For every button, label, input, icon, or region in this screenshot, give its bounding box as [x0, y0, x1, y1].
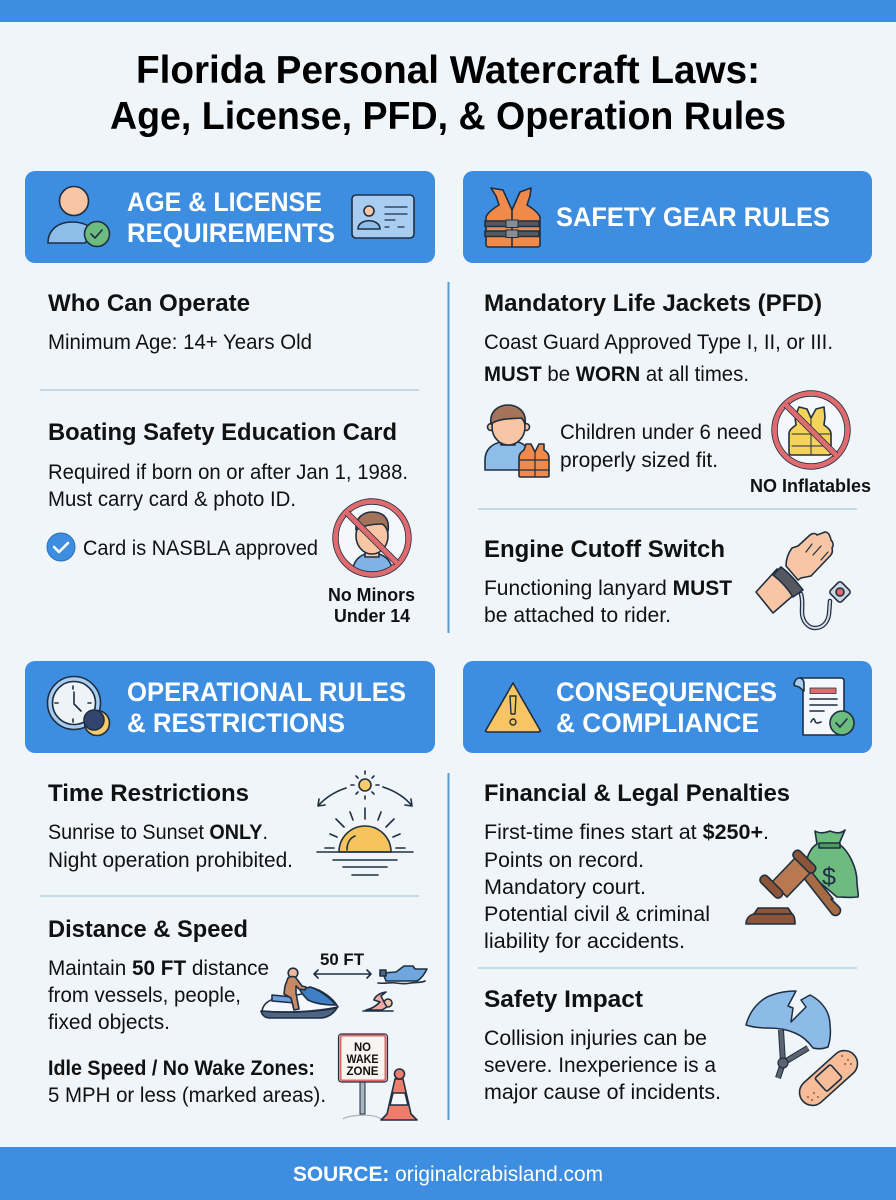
header: consequences: & COMPLIANCE — [556, 708, 759, 738]
icon: boat — [378, 966, 427, 984]
icon: jet ski — [261, 968, 338, 1018]
text: children under 6: Children under 6 need — [560, 421, 762, 444]
section: mandatory life jackets: Coast Guard Approved Type I, II, or III. — [484, 331, 833, 354]
icon: life jacket — [485, 188, 540, 247]
footer bar — [0, 1147, 896, 1200]
section: time restrictions: Time Restrictions — [48, 780, 249, 807]
panel: age and license requirements — [25, 171, 435, 626]
section: boating safety education card: Required if born on or after Jan 1, 1988. — [48, 461, 408, 484]
icon: ID card — [352, 195, 414, 238]
section: engine cutoff switch: be attached to rider. — [484, 604, 671, 627]
icon: no wake zone sign: NO — [354, 1040, 371, 1054]
icon: swimmer — [363, 992, 393, 1011]
section: boating safety education card: Must carry card & photo ID. — [48, 488, 296, 511]
section: time restrictions: Night operation prohibited. — [48, 849, 293, 872]
section: mandatory life jackets: MUST be WORN at all times. — [484, 363, 749, 386]
header: safety gear — [463, 171, 872, 263]
text: children under 6 — [560, 421, 762, 472]
label: no inflatables: NO Inflatables — [750, 476, 871, 496]
icon: warning triangle — [486, 683, 540, 732]
label: 50 FT distance arrow — [314, 950, 371, 978]
header: age and license — [25, 171, 435, 263]
icon: blue check — [47, 533, 75, 561]
section: financial and legal penalties: First-time fines start at $250+. — [484, 821, 769, 844]
section: financial and legal penalties: Financial & Legal Penalties — [484, 780, 790, 807]
section: distance and speed: Distance & Speed — [48, 916, 248, 943]
section: boating safety education card: Boating Safety Education Card — [48, 419, 397, 446]
footer bar: SOURCE: originalcrabisland.com — [293, 1163, 603, 1186]
text: idle speed — [48, 1057, 326, 1107]
title: Age, License, PFD, & Operation Rules — [110, 95, 786, 138]
icon: no wake zone sign — [338, 1034, 388, 1119]
section: time restrictions — [48, 780, 293, 872]
icon: no wake zone sign: ZONE — [346, 1064, 378, 1078]
panel: consequences and compliance — [463, 661, 872, 1111]
top bar — [0, 0, 896, 22]
section: safety impact: Collision injuries can be — [484, 1027, 707, 1050]
section: engine cutoff switch: Functioning lanyard MUST — [484, 577, 732, 600]
icon: person with check — [48, 186, 110, 246]
icon: document with check — [794, 678, 854, 735]
section: financial and legal penalties: Potential civil & criminal — [484, 903, 710, 926]
label: 50 FT distance arrow: 50 FT — [320, 950, 365, 969]
section: financial and legal penalties: Mandatory court. — [484, 876, 646, 899]
header: consequences — [463, 661, 872, 753]
header: age and license: AGE & LICENSE — [127, 187, 322, 217]
icon: cracked helmet — [746, 991, 830, 1078]
icon: gavel and money bag — [746, 830, 858, 924]
section: financial and legal penalties: Points on record. — [484, 849, 644, 872]
section: who can operate: Minimum Age: 14+ Years Old — [48, 331, 312, 354]
label: no minors under 14 — [328, 585, 415, 626]
text: idle speed: 5 MPH or less (marked areas). — [48, 1084, 326, 1107]
section: financial and legal penalties — [484, 780, 790, 953]
section: mandatory life jackets — [484, 290, 833, 386]
section: who can operate — [48, 290, 312, 354]
text: NASBLA approved: Card is NASBLA approved — [83, 537, 318, 560]
section: who can operate: Who Can Operate — [48, 290, 250, 317]
section: distance and speed: Maintain 50 FT distance — [48, 957, 269, 980]
section: financial and legal penalties: liability for accidents. — [484, 930, 685, 953]
label: no minors under 14: No Minors — [328, 585, 415, 605]
title — [110, 49, 786, 138]
section: distance and speed: from vessels, people, — [48, 984, 241, 1007]
icon: clock and moon — [48, 676, 110, 736]
section: safety impact: major cause of incidents. — [484, 1081, 721, 1104]
icon: traffic cone — [381, 1069, 417, 1120]
icon: no wake zone sign: WAKE — [346, 1052, 378, 1066]
icon: child with life jacket — [485, 405, 549, 477]
text: children under 6: properly sized fit. — [560, 449, 718, 472]
header: operational rules — [25, 661, 435, 753]
header: operational rules: OPERATIONAL RULES — [127, 677, 406, 707]
icon: no minors — [334, 500, 410, 576]
section: distance and speed — [48, 916, 269, 1034]
panel: safety gear rules — [463, 171, 872, 628]
section: engine cutoff switch: Engine Cutoff Switch — [484, 536, 725, 563]
section: distance and speed: fixed objects. — [48, 1011, 170, 1034]
header: safety gear: SAFETY GEAR RULES — [556, 202, 830, 232]
header: age and license: REQUIREMENTS — [127, 218, 335, 248]
section: engine cutoff switch — [484, 536, 732, 627]
icon: bandage — [794, 1045, 863, 1111]
section: time restrictions: Sunrise to Sunset ONLY. — [48, 821, 268, 844]
header: consequences: CONSEQUENCES — [556, 677, 777, 707]
section: boating safety education card — [48, 419, 408, 511]
icon: sunrise to sunset — [317, 771, 413, 875]
text: idle speed: Idle Speed / No Wake Zones: — [48, 1057, 315, 1080]
section: safety impact: severe. Inexperience is a — [484, 1054, 716, 1077]
header: operational rules: & RESTRICTIONS — [127, 708, 345, 738]
label: no minors under 14: Under 14 — [334, 606, 410, 626]
icon: wrist lanyard — [756, 532, 851, 628]
title: Florida Personal Watercraft Laws: — [136, 49, 760, 92]
section: safety impact: Safety Impact — [484, 986, 643, 1013]
icon: gavel and money bag: $ — [822, 863, 836, 891]
icon: no inflatables — [774, 393, 848, 467]
section: safety impact — [484, 986, 721, 1104]
panel: operational rules and restrictions — [25, 661, 435, 1120]
section: mandatory life jackets: Mandatory Life Jackets (PFD) — [484, 290, 822, 317]
